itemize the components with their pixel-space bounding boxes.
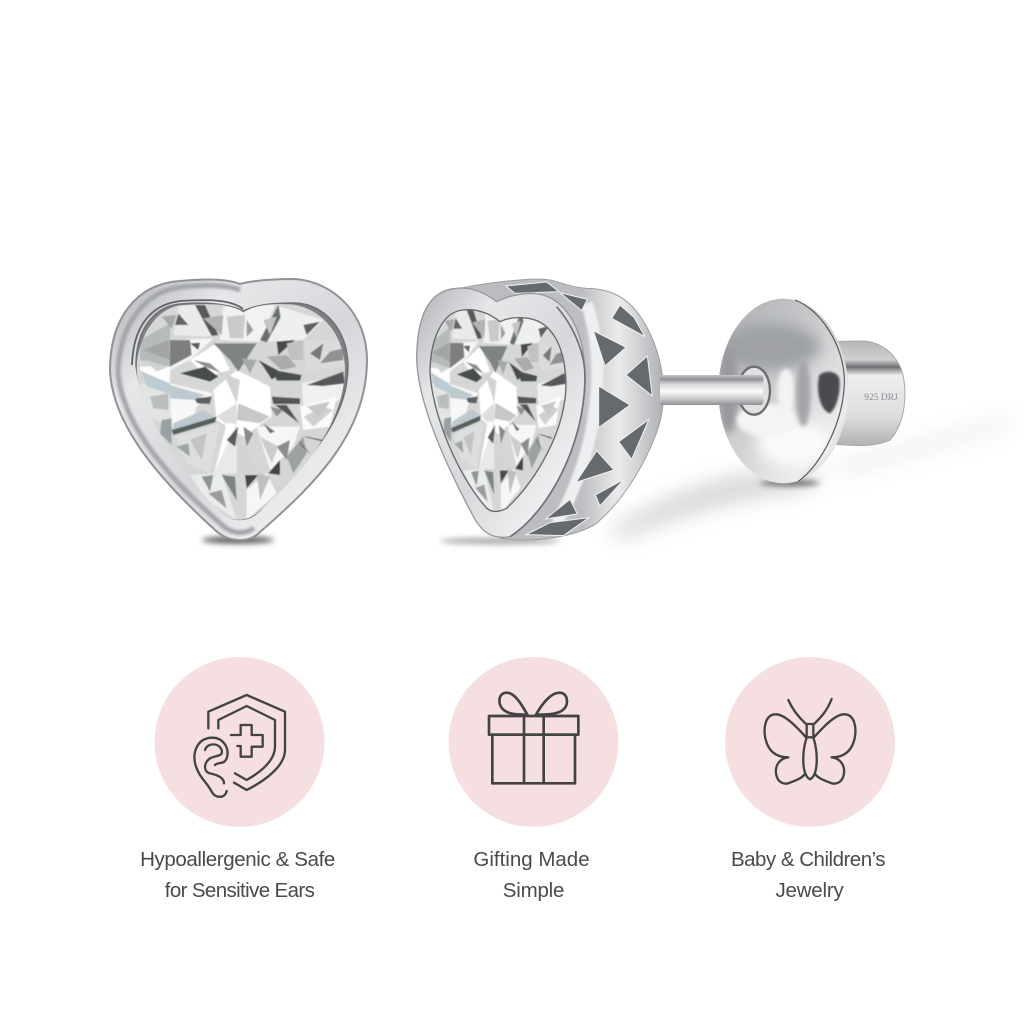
- disc dome shade: [796, 360, 811, 427]
- icon: butterfly: [765, 699, 855, 784]
- caption: hypoallergenic: [140, 848, 335, 902]
- caption: children's jewelry: Jewelry: [775, 879, 844, 902]
- post: [660, 375, 760, 405]
- disc left shading: [718, 347, 738, 433]
- back post: [660, 375, 763, 405]
- disc light reflection: [777, 368, 795, 415]
- right earring: heart side view: [416, 278, 664, 541]
- right heart gemstone facets: [430, 310, 566, 511]
- left earring: heart front view: [110, 279, 367, 544]
- pink circle: [448, 657, 618, 827]
- left heart bezel: [110, 279, 367, 540]
- post socket ring: [738, 367, 770, 415]
- caption: children's jewelry: Baby & Children’s: [731, 848, 885, 871]
- disc lower bright band: [757, 420, 830, 467]
- badge: gifting: [448, 657, 618, 827]
- badge: hypoallergenic: [154, 657, 324, 827]
- bezel rim line: [510, 307, 585, 537]
- caption: hypoallergenic: for Sensitive Ears: [165, 879, 314, 902]
- left heart bezel shading: [118, 285, 254, 533]
- caption: gifting: Simple: [503, 879, 564, 902]
- left heart inner edge: [136, 303, 348, 520]
- disc: [719, 298, 848, 484]
- front bezel: [417, 288, 585, 537]
- caption: children's jewelry: [731, 848, 885, 902]
- disc dark reflection: [818, 372, 840, 413]
- pink circle: [725, 657, 895, 827]
- caption: gifting: Gifting Made: [473, 848, 590, 871]
- badge: children's jewelry: [725, 657, 895, 827]
- left heart bezel highlight: [132, 300, 243, 365]
- disc rim: [795, 300, 844, 481]
- left heart gemstone facets: [136, 304, 345, 520]
- setting highlight band: [557, 303, 597, 523]
- disc outer dark band: [720, 323, 820, 370]
- setting cut-outs: [506, 282, 652, 536]
- icon: ear and shield with cross: [194, 695, 285, 797]
- icon: gift box: [489, 693, 578, 783]
- stamp: 925 DRJ: 925 DRJ: [864, 393, 898, 403]
- caption: hypoallergenic: Hypoallergenic & Safe: [140, 848, 335, 871]
- ground shadow under left heart: [202, 536, 274, 544]
- openwork setting body: [460, 279, 663, 540]
- caption: gifting: [473, 848, 590, 902]
- right stone outline: [430, 310, 566, 511]
- pink circle: [154, 657, 324, 827]
- screw back: disc and barrel: [660, 293, 905, 490]
- disc dome bright: [737, 403, 797, 437]
- barrel: [827, 341, 905, 446]
- shadow: cast by right earring: [440, 415, 1010, 544]
